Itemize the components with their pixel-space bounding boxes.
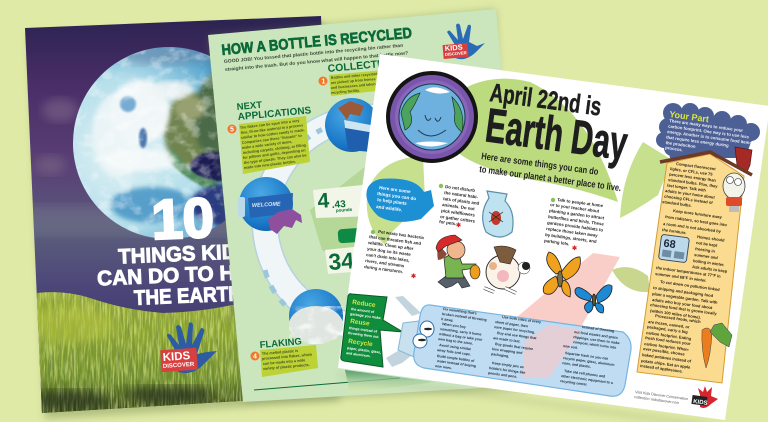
panel: reduce reuse recycle: things instead of	[349, 326, 378, 334]
text: pet waste: wildlife. Clean up after	[367, 240, 414, 251]
panel: house with tips: Processed foods, which	[655, 313, 701, 324]
icon: bottle character with tips: holders for things like	[489, 366, 526, 375]
icon: bottle character with tips: Keep empty jars as	[492, 361, 524, 369]
heading: 10 things kids can do: THINGS KIDS	[118, 240, 251, 269]
footer: credit and logo: KIDS	[693, 399, 708, 407]
panel: house with tips: instead of applesauce.	[640, 363, 683, 374]
recycling ring	[265, 117, 475, 327]
section: next applications: including carpets, clothing, or filling	[243, 143, 306, 155]
sheet bottom fade	[345, 370, 435, 393]
panel: house with tips: last longer. Talk with	[667, 183, 707, 193]
panel: house with tips: not be kept	[696, 240, 718, 248]
icon: bottle character with tips: save paper for recycling.	[494, 325, 535, 335]
panel: house with tips: (within 100 miles of home).	[650, 308, 701, 320]
panel: house with tips: standard bulbs.	[662, 199, 692, 208]
section: next applications: similar to how cotton candy is made.	[241, 128, 305, 140]
leaf: right leaf	[620, 142, 672, 218]
heading: how a bottle is recycled: HOW A BOTTLE IS RECYCLED	[221, 25, 413, 59]
text: talk to people	[544, 197, 605, 252]
section: flaking	[250, 336, 318, 377]
panel: house with tips: lights, or CFLs, use 75	[670, 166, 714, 177]
text: pet waste: Pet waste has bacteria	[378, 229, 425, 240]
stats: recycling numbers: .43	[331, 199, 347, 211]
section: collection: COLLECTION	[327, 57, 396, 75]
icon: bottle character with tips: recycle paper, glass, aluminum	[563, 356, 615, 367]
section: next applications: fine, fil-no-like material in a process	[241, 123, 303, 135]
panel: earth day sheet	[338, 54, 768, 422]
callout: your part cloud: carbon footprint. One way is to use less	[668, 124, 750, 139]
pink pointer shape	[517, 253, 620, 378]
text: do not disturb: animals. Do not	[442, 202, 475, 211]
footer: credit and logo: collection: kidsdiscover.com	[634, 395, 679, 405]
section: next applications: 5	[230, 126, 234, 134]
icon: bottle character with tips: Build simple bottles of	[437, 354, 475, 363]
icon: thermostat: 68	[663, 238, 676, 251]
icon: bottle character with tips: less wrapping and	[492, 347, 523, 355]
text: do not disturb: pick wildflowers	[441, 208, 476, 218]
icon: bottle character with tips: Buy goods that require	[495, 342, 533, 351]
text: talk to people: replace those taken away	[546, 226, 599, 238]
icon: bottle character with tips: sheet of paper, then	[495, 320, 528, 328]
icon: light bulb character	[723, 173, 745, 212]
logo: kids discover hand: DISCOVER	[163, 362, 195, 370]
stats: recycling numbers	[310, 166, 400, 275]
section: collection	[318, 57, 396, 96]
panel: reduce reuse recycle: Reduce	[352, 299, 376, 309]
text: talk to people: parking lots.	[544, 238, 570, 246]
stats: recycling numbers: 4	[317, 189, 330, 213]
icon: flakes ball	[289, 289, 343, 344]
logo: kids discover small	[443, 24, 485, 59]
icon: bottle character with tips: When you buy	[442, 322, 466, 329]
heading: april 22nd is earth day: April 22nd is	[488, 77, 603, 122]
text: do not disturb: for pets.	[439, 219, 457, 226]
icon: boy with bag	[436, 235, 480, 288]
leaf: left leaf	[367, 156, 425, 245]
icon: bottle character with tips: away foils and cups.	[437, 348, 471, 357]
panel: reduce reuse recycle: throwing them out.	[348, 331, 380, 339]
icon: bottle character with tips: packaging.	[491, 352, 510, 358]
text: pet waste	[364, 229, 425, 280]
footer: credit and logo: Visit Kids Discover Conservation	[635, 390, 688, 401]
panel: house with tips: freezing in	[695, 246, 716, 254]
panel: house with tips: plant a vegetable garden. Talk with	[652, 291, 718, 305]
panel: reduce reuse recycle: Reuse	[350, 318, 370, 328]
text: talk to people: or to your teacher about	[550, 202, 600, 214]
logo: kids discover hand	[160, 322, 217, 373]
callout: blue bubble: and wildlife.	[376, 204, 403, 213]
icon: bottle character with tips: pencils and pens.	[488, 371, 518, 379]
text: do not disturb	[439, 184, 480, 229]
icon: welcome mat ball	[238, 177, 302, 234]
callout: your part cloud	[656, 103, 760, 158]
panel: house with tips: from radiators, so heat goes into	[665, 214, 728, 227]
callout: blue bubble: Here are some	[379, 185, 411, 194]
section: next applications: for pillows and quilts, depending on	[243, 148, 306, 160]
footer: credit and logo	[634, 386, 718, 408]
panel: house with tips: Ask adults to keep	[692, 264, 728, 274]
grass field	[36, 292, 243, 413]
stats: recycling numbers: pounds	[336, 207, 353, 213]
text: intro: GOOD JOB! You tossed that plastic bottle into the recycling bin rather than	[224, 43, 403, 64]
section: collection: recycling facility.	[331, 88, 360, 95]
icon: bottle character with tips: recycling center.	[560, 379, 588, 387]
section: collection: are picked up from homes	[331, 77, 376, 85]
section: flaking: FLAKING	[259, 336, 302, 351]
callout: your part cloud: process.	[665, 145, 683, 152]
logo: kids discover small: DISCOVER	[445, 50, 467, 57]
callout: your part cloud: that require less energy during	[666, 135, 729, 148]
panel: house with tips: choosing food that is grown locally	[650, 302, 718, 316]
section: collection: and businesses and taken	[331, 82, 376, 90]
panel: house with tips: Keep more furniture away	[673, 208, 723, 220]
heading: 10 things kids can do: 10	[150, 186, 215, 251]
section: flaking: processed into flakes, which	[262, 353, 313, 361]
icon: bottle character with tips: without a bag or take your	[438, 332, 483, 342]
panel: house with tips: choosing CFLs instead of	[664, 194, 714, 205]
icon: bottle character with tips: Fix something that's	[443, 307, 477, 316]
text: do not disturb: tats of plants and	[443, 196, 480, 206]
section: next applications: made into new plastic bottles.	[244, 160, 296, 170]
icon: planet earth	[73, 47, 226, 238]
text: do not disturb: or gather critters	[440, 214, 476, 224]
panel: cover poster	[25, 16, 345, 419]
logo: kids discover small: KIDS	[444, 42, 463, 53]
text: intro: straight into the trash. But do you know what will happen to that bottle now?	[225, 50, 408, 72]
heading: 10 things kids can do: CAN DO TO HELP	[97, 260, 275, 290]
panel: reduce reuse recycle: the amount of	[351, 307, 375, 314]
panel: reduce reuse recycle: paper, plastic, glass,	[347, 346, 381, 355]
icon: bottle character with tips: other electronic equipment to a	[561, 374, 613, 385]
text: pet waste: rivers, and streams	[365, 258, 405, 268]
text: pet waste: during a rainstorm.	[364, 264, 403, 274]
text: pet waste: that can threaten fish and	[369, 234, 422, 246]
panel: house with tips: are frozen, canned, or	[648, 319, 690, 330]
icon: bottle character with tips: Buy and use things that	[497, 331, 538, 340]
heading: 10 things kids can do	[93, 183, 276, 311]
panel: house with tips: packaged, carry a big	[647, 324, 689, 335]
icon: jar with bug	[483, 191, 513, 237]
icon: bottle character with tips: Take old cell phones and	[564, 369, 605, 379]
icon: bottle character with tips: compost, which turns into	[573, 340, 617, 350]
panel: house with tips: Compact fluorescent	[676, 161, 717, 171]
panel: house with tips: the furniture.	[662, 227, 687, 235]
text: talk to people: planting a garden to attract	[549, 208, 605, 220]
text: talk to people: gardens provide habitats to	[547, 220, 604, 233]
icon: bottle character with tips: broken instead of throwing	[442, 312, 487, 322]
panel: house with tips: baked potatoes instead of	[642, 352, 692, 364]
subheading	[479, 151, 622, 194]
logo: kids discover hand: KIDS	[162, 350, 191, 364]
heading: 10 things kids can do: THE EARTH	[134, 282, 242, 310]
icon: bottle character with tips: clippings, use them to make	[573, 335, 620, 345]
section: next applications: Companies can these "threads" to	[242, 134, 303, 145]
section: next applications	[228, 100, 312, 174]
panel: house with tips: a room and is not absorbed by	[663, 221, 722, 234]
panel: house with tips: Homes should	[697, 234, 725, 243]
callout: your part cloud: There are many ways to reduce your	[669, 118, 744, 133]
panel: house with tips: summer and 68°F in winter.	[655, 271, 707, 283]
heading: april 22nd is earth day: Earth Day	[483, 99, 631, 171]
panel: reduce reuse recycle: and aluminum.	[346, 351, 371, 358]
icon: thermostat	[658, 234, 689, 263]
icon: dog	[484, 246, 530, 293]
icon: bottle character with tips: it away.	[441, 317, 454, 323]
text: do not disturb: the natural habi-	[444, 190, 479, 200]
panel: how a bottle is recycled sheet	[208, 9, 530, 402]
panel: house with tips: adults in your home about	[665, 188, 716, 200]
icon: bottle character with tips: out food wastes and grass	[574, 330, 618, 340]
panel: house with tips: potato chips. Eat an apple	[641, 358, 691, 370]
icon: bottle character with tips: new ones.	[435, 364, 452, 370]
stats: recycling numbers: 34	[328, 247, 355, 275]
text: talk to people: butterflies and birds. These	[548, 214, 605, 227]
panel: house with tips: ever possible, choose	[643, 346, 686, 357]
panel: house with tips: adults who buy your food about	[652, 297, 713, 310]
icon: smiling earth	[388, 73, 476, 161]
icon: bottle character with tips: Use both sides of every	[502, 315, 541, 324]
icon: collection ball	[325, 98, 379, 152]
callout: blue bubble: to help plants	[377, 197, 408, 206]
panel: house with tips	[637, 147, 752, 383]
icon: bottle character with tips: something, carry it home	[440, 327, 482, 337]
panel: house with tips: fresh food reduces your	[645, 335, 691, 346]
callout: your part cloud: Your Part	[669, 109, 710, 124]
text: intro	[224, 43, 408, 72]
icon: welcome mat ball: WELCOME	[252, 201, 281, 209]
callout: blue bubble: things you can do	[377, 191, 417, 201]
panel: house with tips: carbon footprint. Eating	[646, 330, 692, 341]
panel: house with tips: to shipping and packaging food	[653, 285, 714, 298]
text: do not disturb: Do not disturb	[445, 184, 476, 193]
section: flaking: variety of plastic products.	[263, 363, 310, 371]
section: next applications: the type of plastic. They can also be	[244, 153, 307, 165]
section: flaking: The melted plastic is	[262, 349, 298, 356]
panel: reduce reuse recycle: Recycle	[348, 338, 373, 348]
icon: bottle character with tips	[386, 296, 631, 396]
decorative bottom rule	[254, 378, 400, 390]
subheading: to make our planet a better place to live.	[479, 164, 622, 194]
icon: bottle character with tips: water instead of buying	[436, 359, 476, 368]
section: next applications: make a wide variety of items,	[242, 140, 293, 150]
text: pet waste: your dog so its waste	[367, 246, 412, 257]
callout: your part cloud: energy. Another is to consume food items	[667, 129, 753, 146]
section: next applications: NEXT	[236, 100, 263, 113]
section: flaking: 4	[253, 354, 257, 360]
icon: bottle character with tips: Separate trash so you can	[565, 351, 609, 361]
icon: bottle character with tips: are made to last.	[493, 336, 521, 344]
icon: carrot	[702, 323, 732, 368]
text: talk to people: Talk to people at home	[557, 197, 604, 208]
section: collection: Bottles and other recyclables	[331, 72, 381, 80]
section: collection: 1	[322, 78, 326, 86]
section: next applications: The flakes can be spun into a very	[240, 119, 301, 130]
panel: house with tips: boiling in winter.	[693, 258, 725, 267]
icon: orange butterfly	[543, 252, 580, 297]
panel: reduce reuse recycle: garbage you make.	[350, 312, 382, 320]
icon: bottle character with tips: new soil.	[563, 344, 578, 350]
section: flaking: can be made into a wide	[263, 358, 305, 366]
text: pet waste: ✱	[411, 273, 416, 280]
icon: bottle character with tips: Instead of throwing	[582, 325, 614, 333]
subheading: Here are some things you can do	[481, 151, 599, 178]
icon: blue butterfly	[575, 285, 612, 313]
heading: april 22nd is earth day	[483, 77, 631, 171]
panel: house with tips: standard bulbs. Plus, they	[668, 177, 719, 189]
text: do not disturb: ✱	[456, 222, 461, 229]
icon: bottle character with tips: cans, and plastic.	[562, 361, 591, 369]
callout: your part cloud: the production	[665, 140, 696, 149]
panel: house with tips: To cut down on pollution linked	[660, 279, 720, 292]
text: talk to people: ✱	[572, 245, 577, 252]
panel: house with tips: summer and	[694, 252, 719, 260]
callout: blue bubble	[366, 179, 434, 222]
panel: reduce reuse recycle	[341, 294, 403, 367]
icon: bottle character with tips: Avoid using similar	[439, 343, 472, 351]
panel: house with tips: carbon footprint. When-	[644, 341, 690, 352]
leaf: large title leaf	[451, 79, 618, 202]
panel: house with tips: percent less energy than	[669, 172, 717, 183]
leaf: small tan leaf	[612, 267, 650, 292]
panel: house with tips: the indoor temperatures at 77°F in	[656, 265, 721, 279]
section: next applications: APPLICATIONS	[237, 105, 312, 123]
icon: bottle character with tips: own bag to the store.	[438, 337, 473, 346]
text: pet waste: can't drain into lakes,	[366, 252, 410, 263]
text: talk to people: by buildings, streets, and	[545, 232, 597, 244]
